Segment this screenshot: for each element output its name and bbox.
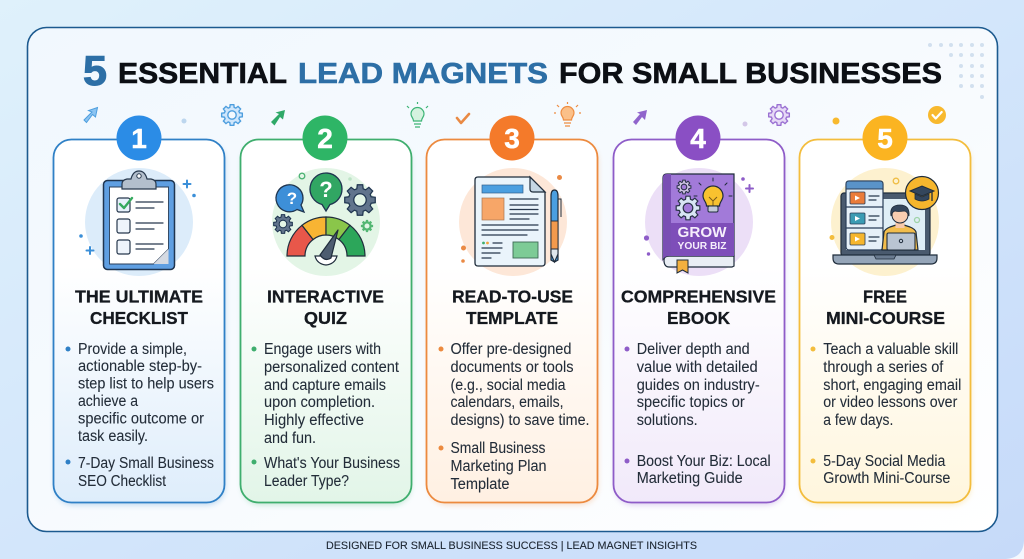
card 4 description <box>624 341 760 429</box>
card 1 description: specific outcome or <box>78 410 204 428</box>
card 3 description: calendars, emails, <box>450 394 564 411</box>
card 4 description: value with detailed <box>637 359 758 376</box>
card 2 example: What's Your Business <box>264 455 400 472</box>
card 3 description: Offer pre-designed <box>450 341 572 358</box>
top decorations: green arrow <box>271 110 285 126</box>
card 5 heading: MINI-COURSE <box>826 308 945 328</box>
card 3 heading: TEMPLATE <box>466 308 558 328</box>
card 5 number badge <box>862 116 908 160</box>
card 2 description: Highly effective <box>264 412 364 429</box>
card 3 description: designs) to save time. <box>450 412 590 429</box>
card 2 heading: INTERACTIVE <box>267 286 384 306</box>
card 4 description: Deliver depth and <box>637 341 750 358</box>
card 5 example <box>810 453 950 487</box>
card 3 heading: READ-TO-USE <box>452 286 573 306</box>
card 1 heading <box>75 286 203 328</box>
card 2 description: personalized content <box>264 359 400 376</box>
card 5 description: or video lessons over <box>823 394 957 411</box>
card 1 description: task easily. <box>78 428 148 445</box>
title: ESSENTIAL <box>118 58 287 90</box>
top decorations: blue arrow <box>84 108 98 122</box>
card 2 description: upon completion. <box>264 394 375 411</box>
card 4 example <box>624 453 771 487</box>
card 1 description: Provide a simple, <box>78 341 187 358</box>
card 4 description: solutions. <box>637 412 698 429</box>
card 2 heading <box>267 286 384 328</box>
card 5 number badge: 5 <box>877 123 893 154</box>
card 3 example: Marketing Plan <box>450 458 546 475</box>
icon: quiz gauge: ? <box>319 177 333 202</box>
card 5 description: short, engaging email <box>823 377 961 394</box>
panel: card 2 quiz <box>240 116 412 505</box>
card 3 number badge: 3 <box>504 123 520 154</box>
title: 5 <box>83 47 107 94</box>
top decorations: green bulb <box>407 102 428 127</box>
card 2 example <box>252 455 400 490</box>
footer text: DESIGNED FOR SMALL BUSINESS SUCCESS | LEAD MAGNET INSIGHTS <box>326 540 697 552</box>
card 3 heading <box>452 286 573 328</box>
card 4 example: Marketing Guide <box>637 470 743 487</box>
top decorations: yellow dot <box>832 118 840 124</box>
top decorations: purple gear <box>769 105 789 125</box>
panel: card 3 template <box>426 116 598 505</box>
card 2 number badge: 2 <box>317 123 333 154</box>
card 4 number badge: 4 <box>690 123 706 154</box>
card 2 description: and fun. <box>264 430 316 447</box>
card 2 description: Engage users with <box>264 341 381 358</box>
card 1 number badge <box>116 116 162 160</box>
card 5 description: a few days. <box>823 412 893 429</box>
card 1 description <box>66 341 214 445</box>
panel: card 5 mini-course <box>800 116 971 505</box>
card 4 description: specific topics or <box>637 394 745 411</box>
top decorations: blue gear <box>222 105 242 125</box>
card 1 number badge: 1 <box>131 123 147 154</box>
icon: laptop course <box>830 168 939 276</box>
top decorations: blue dot <box>182 118 186 124</box>
card 4 number badge <box>676 116 720 160</box>
card 5 heading: FREE <box>863 286 907 306</box>
card 5 description <box>810 341 961 429</box>
card 1 heading: CHECKLIST <box>90 308 188 328</box>
icon: document and pen <box>459 168 567 276</box>
card 4 heading: COMPREHENSIVE <box>621 286 776 306</box>
icon: ebook: GROW <box>678 224 727 241</box>
card 5 example: 5-Day Social Media <box>823 453 946 470</box>
title <box>83 47 942 94</box>
top decorations: purple arrow <box>633 110 647 125</box>
card 1 example: SEO Checklist <box>78 473 167 490</box>
card 1 description: achieve a <box>78 393 138 410</box>
card 2 description <box>252 341 400 447</box>
card 2 description: and capture emails <box>264 377 386 394</box>
panel: card 1 checklist <box>54 116 225 505</box>
card 4 heading: EBOOK <box>667 308 730 328</box>
card 1 description: step list to help users <box>78 376 214 392</box>
card 4 heading <box>621 286 776 328</box>
card 2 number badge <box>302 116 348 160</box>
icon: quiz gauge: ? <box>287 189 297 208</box>
card 3 example <box>438 440 546 493</box>
top decorations: yellow check badge <box>928 106 946 124</box>
card 1 example <box>66 455 214 490</box>
decorative dot grid <box>928 43 984 99</box>
card 5 description: Teach a valuable skill <box>823 341 958 358</box>
card 4 description: guides on industry- <box>637 377 760 394</box>
card 1 example: 7-Day Small Business <box>78 455 214 472</box>
top decorations: orange bulb <box>554 102 581 126</box>
title: FOR SMALL BUSINESSES <box>559 58 942 90</box>
panel: card 4 ebook <box>614 116 784 505</box>
card 2 example: Leader Type? <box>264 473 349 490</box>
top decorations: purple dot <box>742 122 748 126</box>
card 3 description <box>438 341 590 429</box>
card 5 description: through a series of <box>823 359 944 376</box>
icon: ebook: YOUR BIZ <box>678 241 726 252</box>
card 4 example: Boost Your Biz: Local <box>637 453 771 470</box>
card 3 example: Small Business <box>450 440 546 457</box>
card 3 example: Template <box>450 476 510 493</box>
card 1 heading: THE ULTIMATE <box>75 286 203 306</box>
card 3 description: documents or tools <box>450 359 574 376</box>
top decorations: orange check <box>457 114 469 123</box>
icon: clipboard <box>79 168 196 276</box>
card 3 description: (e.g., social media <box>450 377 566 394</box>
card 5 heading <box>826 286 945 328</box>
card 2 heading: QUIZ <box>304 308 347 328</box>
title: LEAD MAGNETS <box>298 58 548 90</box>
card 5 example: Growth Mini-Course <box>823 470 950 487</box>
icon: quiz gauge <box>272 168 380 276</box>
card 3 number badge <box>490 116 534 160</box>
icon: ebook <box>644 168 753 276</box>
card 1 description: actionable step-by- <box>78 358 202 375</box>
